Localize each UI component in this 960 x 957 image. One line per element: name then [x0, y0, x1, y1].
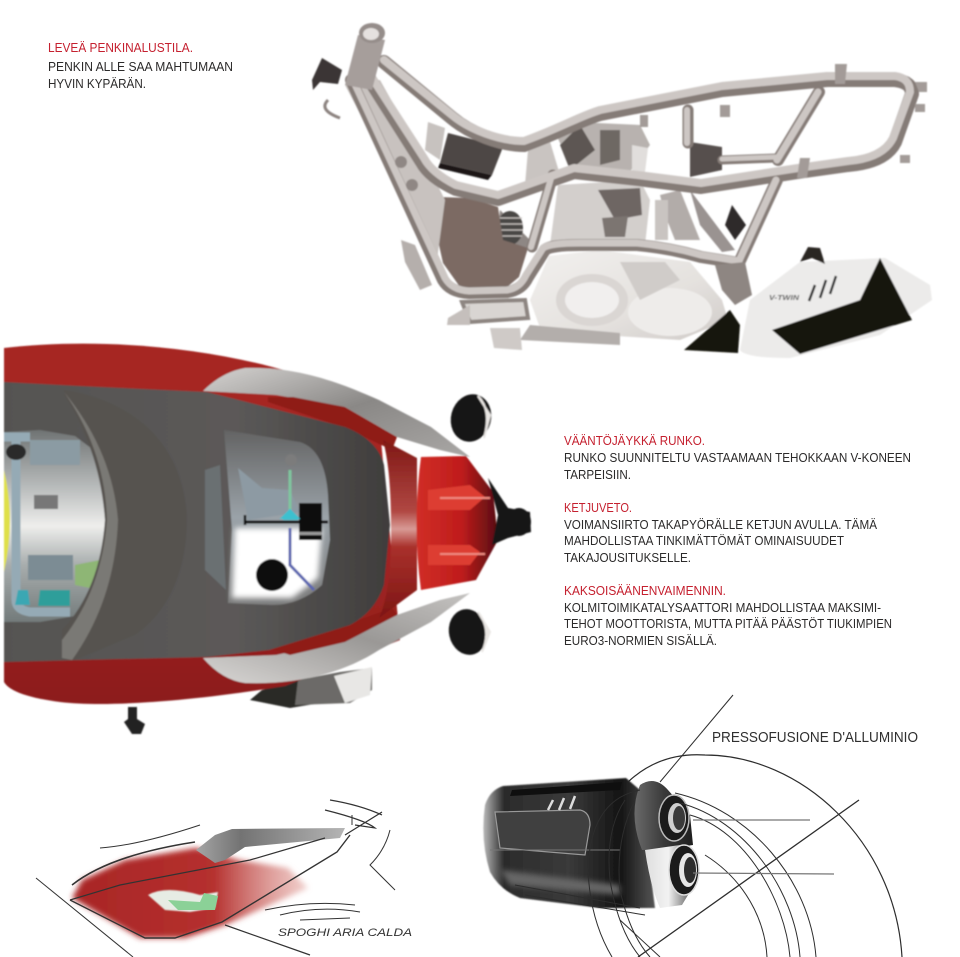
black canister: [772, 258, 912, 354]
heading: chain: KETJUVETO.: [564, 500, 632, 515]
left opening under seat: [4, 430, 120, 622]
sketch: tail fairing with hot air vent: [36, 800, 412, 957]
black divider: [244, 520, 328, 524]
brown side plate: [435, 197, 528, 287]
sketch lines: [36, 800, 395, 957]
engine and frame illustration: [312, 23, 932, 358]
red heading: LEVEÄ PENKINALUSTILA.: [48, 40, 193, 55]
yellow fuel element: [4, 470, 10, 572]
body line: PENKIN ALLE SAA MAHTUMAAN: [48, 59, 233, 74]
heading: frame: VÄÄNTÖJÄYKKÄ RUNKO.: [564, 433, 705, 448]
black tail tip: [488, 478, 531, 545]
body: chain line 3: TAKAJOUSITUKSELLE.: [564, 550, 691, 565]
rear swingarm pivot: [715, 262, 752, 305]
tubular frame: [351, 60, 912, 293]
battery box: [425, 122, 503, 180]
red side strips: [268, 397, 397, 450]
rear frame brackets: [640, 64, 927, 178]
horizontal axis lines: [693, 820, 834, 874]
body: silencer line 1: KOLMITOIMIKATALYSAATTORI MAHDOLLISTAA MAKSIMI-: [564, 600, 881, 615]
body line: HYVIN KYPÄRÄN.: [48, 76, 146, 91]
vents: [809, 276, 836, 301]
seat well: [4, 382, 390, 662]
body: silencer line 2: TEHOT MOOTTORISTA, MUTTA PITÄÄ PÄÄSTÖT TIUKIMPIEN: [564, 616, 892, 631]
body: frame line 2: TARPEISIIN.: [564, 467, 631, 482]
twin silencer: [684, 247, 932, 358]
grey handle: [196, 828, 345, 863]
body: silencer line 3: EURO3-NORMIEN SISÄLLÄ.: [564, 633, 717, 648]
mount: [800, 247, 825, 264]
transparent seat lens: [62, 390, 187, 660]
tail lamp: [416, 456, 498, 590]
handwritten label: PRESSOFUSIONE D'ALLUMINIO: [712, 729, 918, 746]
white shield: [740, 258, 932, 358]
bottom outlet: [669, 845, 699, 895]
body: chain line 2: MAHDOLLISTAA TINKIMÄTTÖMÄT OMINAISUUDET: [564, 533, 844, 548]
engine internals behind the frame: [401, 122, 746, 290]
V-TWIN badge: V-TWIN: [769, 295, 800, 302]
blue hose: [290, 528, 314, 590]
top outlet: [659, 795, 689, 841]
cyan connector: [282, 510, 298, 519]
exhaust underside: [250, 667, 372, 708]
body: chain line 1: VOIMANSIIRTO TAKAPYÖRÄLLE KETJUN AVULLA. TÄMÄ: [564, 517, 877, 532]
frame shadow strokes: [351, 62, 912, 293]
handwritten label: SPOGHI ARIA CALDA: [278, 927, 412, 939]
text: seat storage: [48, 40, 233, 91]
headstock plate: [345, 80, 445, 260]
silencer body: [483, 778, 655, 908]
small circle: [285, 454, 297, 466]
vent with green arrow: [148, 890, 218, 912]
scooter top view: [4, 344, 531, 734]
construction lines: [515, 695, 902, 957]
body: frame line 1: RUNKO SUUNNITELTU VASTAAMAAN TEHOKKAAN V-KONEEN: [564, 450, 911, 465]
silver fairing bottom: [203, 593, 470, 683]
rear red panel: [379, 440, 417, 618]
text: frame, chain drive, silencer: [564, 433, 911, 648]
red shading: [72, 848, 308, 938]
component: [30, 440, 80, 465]
black latch: [299, 503, 322, 540]
engine crankcase: [447, 250, 728, 350]
frame highlight strokes: [353, 60, 910, 291]
front casting: [634, 781, 699, 908]
turn signal top: [445, 390, 497, 446]
black bracket: [684, 310, 740, 353]
green hose: [288, 470, 292, 512]
kickstand: [124, 707, 145, 734]
tube: [4, 437, 70, 612]
heading: silencer: KAKSOISÄÄNENVAIMENNIN.: [564, 583, 726, 598]
silver fairing top: [203, 368, 470, 457]
fuel cap: [256, 559, 288, 591]
turn signal bottom: [445, 606, 491, 658]
red body: [4, 344, 400, 704]
sketch: twin exhaust: [483, 695, 918, 957]
headstock: [312, 23, 418, 191]
helmet box: [205, 430, 330, 605]
